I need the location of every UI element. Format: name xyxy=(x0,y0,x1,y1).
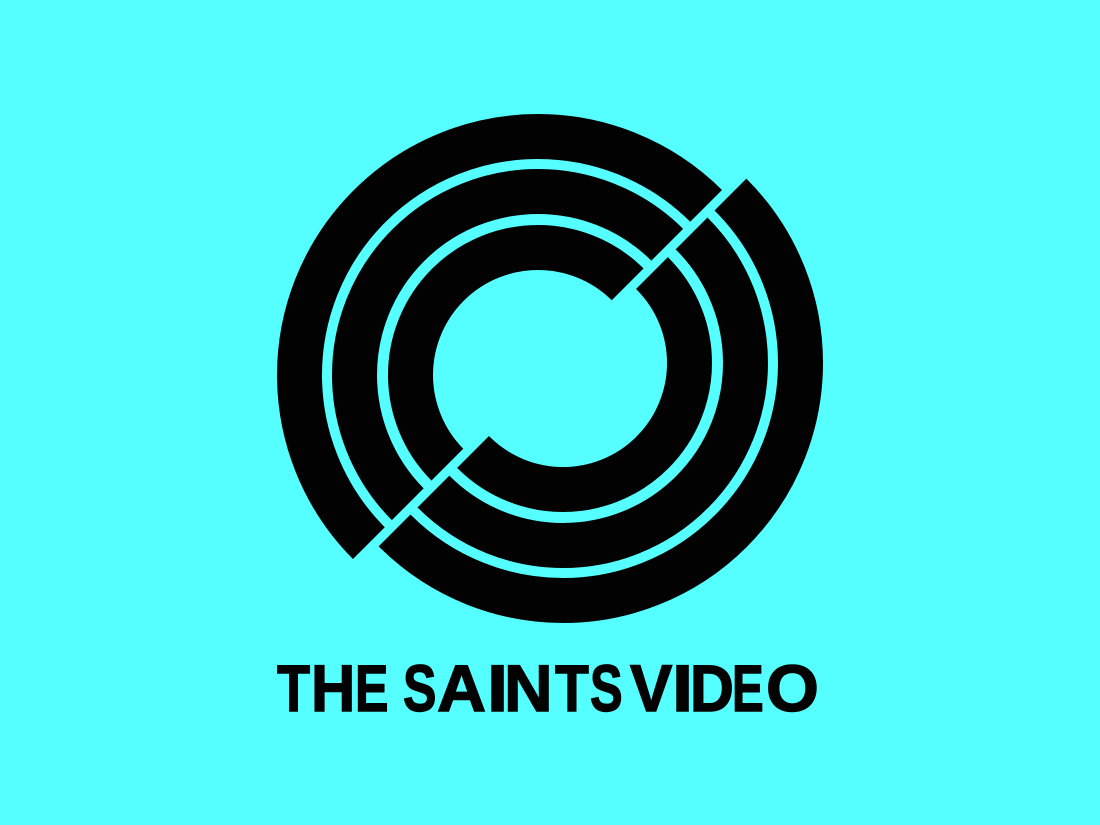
wordmark: THE SAINTSVIDEO: A xyxy=(437,650,486,724)
wordmark: THE SAINTSVIDEO: V xyxy=(630,650,672,724)
wordmark: THE SAINTSVIDEO: T xyxy=(276,650,310,724)
wordmark: THE SAINTSVIDEO: O xyxy=(766,650,819,724)
wordmark: THE SAINTSVIDEO: I xyxy=(486,650,508,724)
logo: concentric split rings xyxy=(277,114,823,623)
lower-right half rings xyxy=(378,178,823,623)
wordmark: THE SAINTSVIDEO: E xyxy=(732,650,764,724)
wordmark: THE SAINTSVIDEO: D xyxy=(690,650,734,724)
wordmark: THE SAINTSVIDEO: S xyxy=(590,650,623,724)
wordmark: THE SAINTSVIDEO: H xyxy=(311,650,355,724)
wordmark: THE SAINTSVIDEO: I xyxy=(672,650,693,724)
upper-left half rings xyxy=(277,114,722,559)
wordmark: THE SAINTSVIDEO: S xyxy=(403,650,436,724)
wordmark: THE SAINTSVIDEO: T xyxy=(555,650,589,724)
wordmark: THE SAINTSVIDEO xyxy=(276,650,819,724)
wordmark: THE SAINTSVIDEO: N xyxy=(504,650,553,724)
wordmark: THE SAINTSVIDEO: E xyxy=(355,650,388,724)
